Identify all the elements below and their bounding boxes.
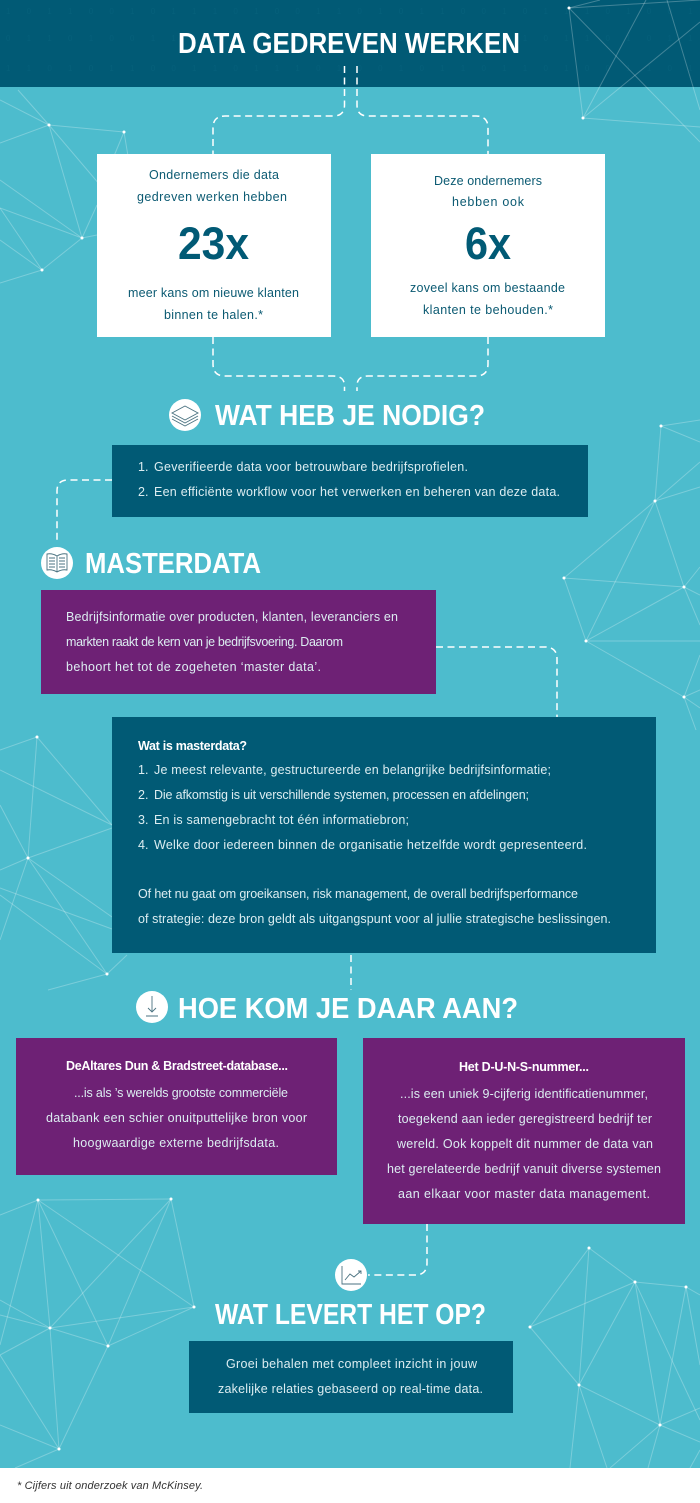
panel: 23x statistic: meer kans om nieuwe klanten <box>128 286 299 300</box>
panel: wat is masterdata: 4. <box>138 838 148 852</box>
panel: 6x statistic: Deze ondernemers <box>434 174 542 188</box>
panel: database <box>16 1038 337 1175</box>
panel: requirements list: 1. <box>138 460 148 474</box>
panel: database: ...is als ’s werelds grootste commerciële <box>74 1086 288 1100</box>
panel: requirements list <box>112 445 588 517</box>
panel: requirements list: 2. <box>138 485 148 499</box>
arrow: dashed connector to heading <box>350 955 352 990</box>
network pattern: bottom right <box>528 1246 700 1468</box>
panel: D-U-N-S number: wereld. Ook koppelt dit nummer de data van <box>396 1137 653 1151</box>
panel: wat is masterdata: En is samengebracht tot één informatiebron; <box>154 813 409 827</box>
icon: line chart <box>335 1259 367 1291</box>
arrow: dashed connector from title to left box <box>213 66 344 154</box>
panel: masterdata intro <box>41 590 436 694</box>
network pattern: top left <box>0 90 128 283</box>
icon: stacked layers <box>169 399 201 431</box>
panel: wat is masterdata: 3. <box>138 813 148 827</box>
panel: wat is masterdata: 1. <box>138 763 148 777</box>
panel: D-U-N-S number: Het D-U-N-S-nummer... <box>459 1060 589 1074</box>
icon: open book <box>41 547 73 579</box>
heading: masterdata: MASTERDATA <box>85 548 261 580</box>
panel: 23x statistic: 23x <box>178 218 249 269</box>
arrow: dashed connector to masterdata <box>57 480 112 543</box>
footer band <box>0 1468 700 1503</box>
arrow: dashed connector to definition panel <box>436 647 557 717</box>
panel: 6x statistic: klanten te behouden.* <box>423 303 553 317</box>
panel: database: databank een schier onuitputtelijke bron voor <box>46 1111 307 1125</box>
panel: D-U-N-S number: ...is een uniek 9-cijferig identificatienummer, <box>400 1087 648 1101</box>
panel: 23x statistic: gedreven werken hebben <box>137 190 287 204</box>
panel: wat is masterdata <box>112 717 656 953</box>
panel: 6x statistic: zoveel kans om bestaande <box>410 281 565 295</box>
network pattern: top right <box>568 0 700 142</box>
arrow: dashed connector to chart icon <box>368 1224 427 1275</box>
panel: wat is masterdata: 2. <box>138 788 148 802</box>
panel: D-U-N-S number: het gerelateerde bedrijf vanuit diverse systemen <box>387 1162 661 1176</box>
panel: D-U-N-S number: aan elkaar voor master data management. <box>398 1187 650 1201</box>
footnote: * Cijfers uit onderzoek van McKinsey. <box>17 1480 203 1492</box>
heading: hoe kom je daar aan: HOE KOM JE DAAR AAN? <box>178 993 518 1025</box>
panel: wat is masterdata: Je meest relevante, gestructureerde en belangrijke bedrijfsinformatie; <box>154 763 551 777</box>
header band <box>0 0 700 87</box>
network pattern: right middle <box>562 420 700 730</box>
panel: wat is masterdata: Wat is masterdata? <box>138 739 247 753</box>
panel: wat is masterdata: Of het nu gaat om groeikansen, risk management, de overall bedrijfsperformance <box>138 887 578 901</box>
heading: wat heb je nodig: WAT HEB JE NODIG? <box>215 400 485 432</box>
icon: download <box>136 991 168 1023</box>
panel: D-U-N-S number <box>363 1038 685 1224</box>
panel: 6x statistic: hebben ook <box>452 195 525 209</box>
panel: database: hoogwaardige externe bedrijfsdata. <box>73 1136 279 1150</box>
panel: requirements list: Geverifieerde data voor betrouwbare bedrijfsprofielen. <box>154 460 468 474</box>
panel: wat is masterdata: of strategie: deze bron geldt als uitgangspunt voor al jullie strategische beslissingen. <box>138 912 611 926</box>
panel: 6x statistic: 6x <box>465 218 511 269</box>
arrow: dashed connector from left box to heading <box>213 337 344 391</box>
heading: wat levert het op: WAT LEVERT HET OP? <box>215 1299 486 1331</box>
panel: masterdata intro: behoort het tot de zogeheten ‘master data’. <box>66 660 321 674</box>
title: DATA GEDREVEN WERKEN <box>178 28 520 60</box>
panel: 23x statistic: binnen te halen.* <box>164 308 263 322</box>
panel: 6x statistic <box>371 154 605 337</box>
panel: masterdata intro: Bedrijfsinformatie over producten, klanten, leveranciers en <box>66 610 398 624</box>
panel: wat is masterdata: Die afkomstig is uit verschillende systemen, processen en afdelingen; <box>154 788 529 802</box>
network pattern: bottom left <box>0 1198 196 1468</box>
panel: D-U-N-S number: toegekend aan ieder geregistreerd bedrijf ter <box>398 1112 652 1126</box>
network pattern: left middle <box>0 736 127 990</box>
arrow: dashed connector from title to right box <box>357 66 488 154</box>
panel: result: Groei behalen met compleet inzicht in jouw <box>226 1357 478 1371</box>
panel: result: zakelijke relaties gebaseerd op real-time data. <box>218 1382 483 1396</box>
arrow: dashed connector from right box to heading <box>357 337 488 391</box>
panel: masterdata intro: markten raakt de kern van je bedrijfsvoering. Daarom <box>66 635 343 649</box>
panel: 23x statistic <box>97 154 331 337</box>
panel: wat is masterdata: Welke door iedereen binnen de organisatie hetzelfde wordt gepresenteerd. <box>154 838 587 852</box>
panel: 23x statistic: Ondernemers die data <box>149 168 279 182</box>
panel: result <box>189 1341 513 1413</box>
panel: database: DeAltares Dun & Bradstreet-database... <box>66 1059 288 1073</box>
panel: requirements list: Een efficiënte workflow voor het verwerken en beheren van deze data. <box>154 485 560 499</box>
